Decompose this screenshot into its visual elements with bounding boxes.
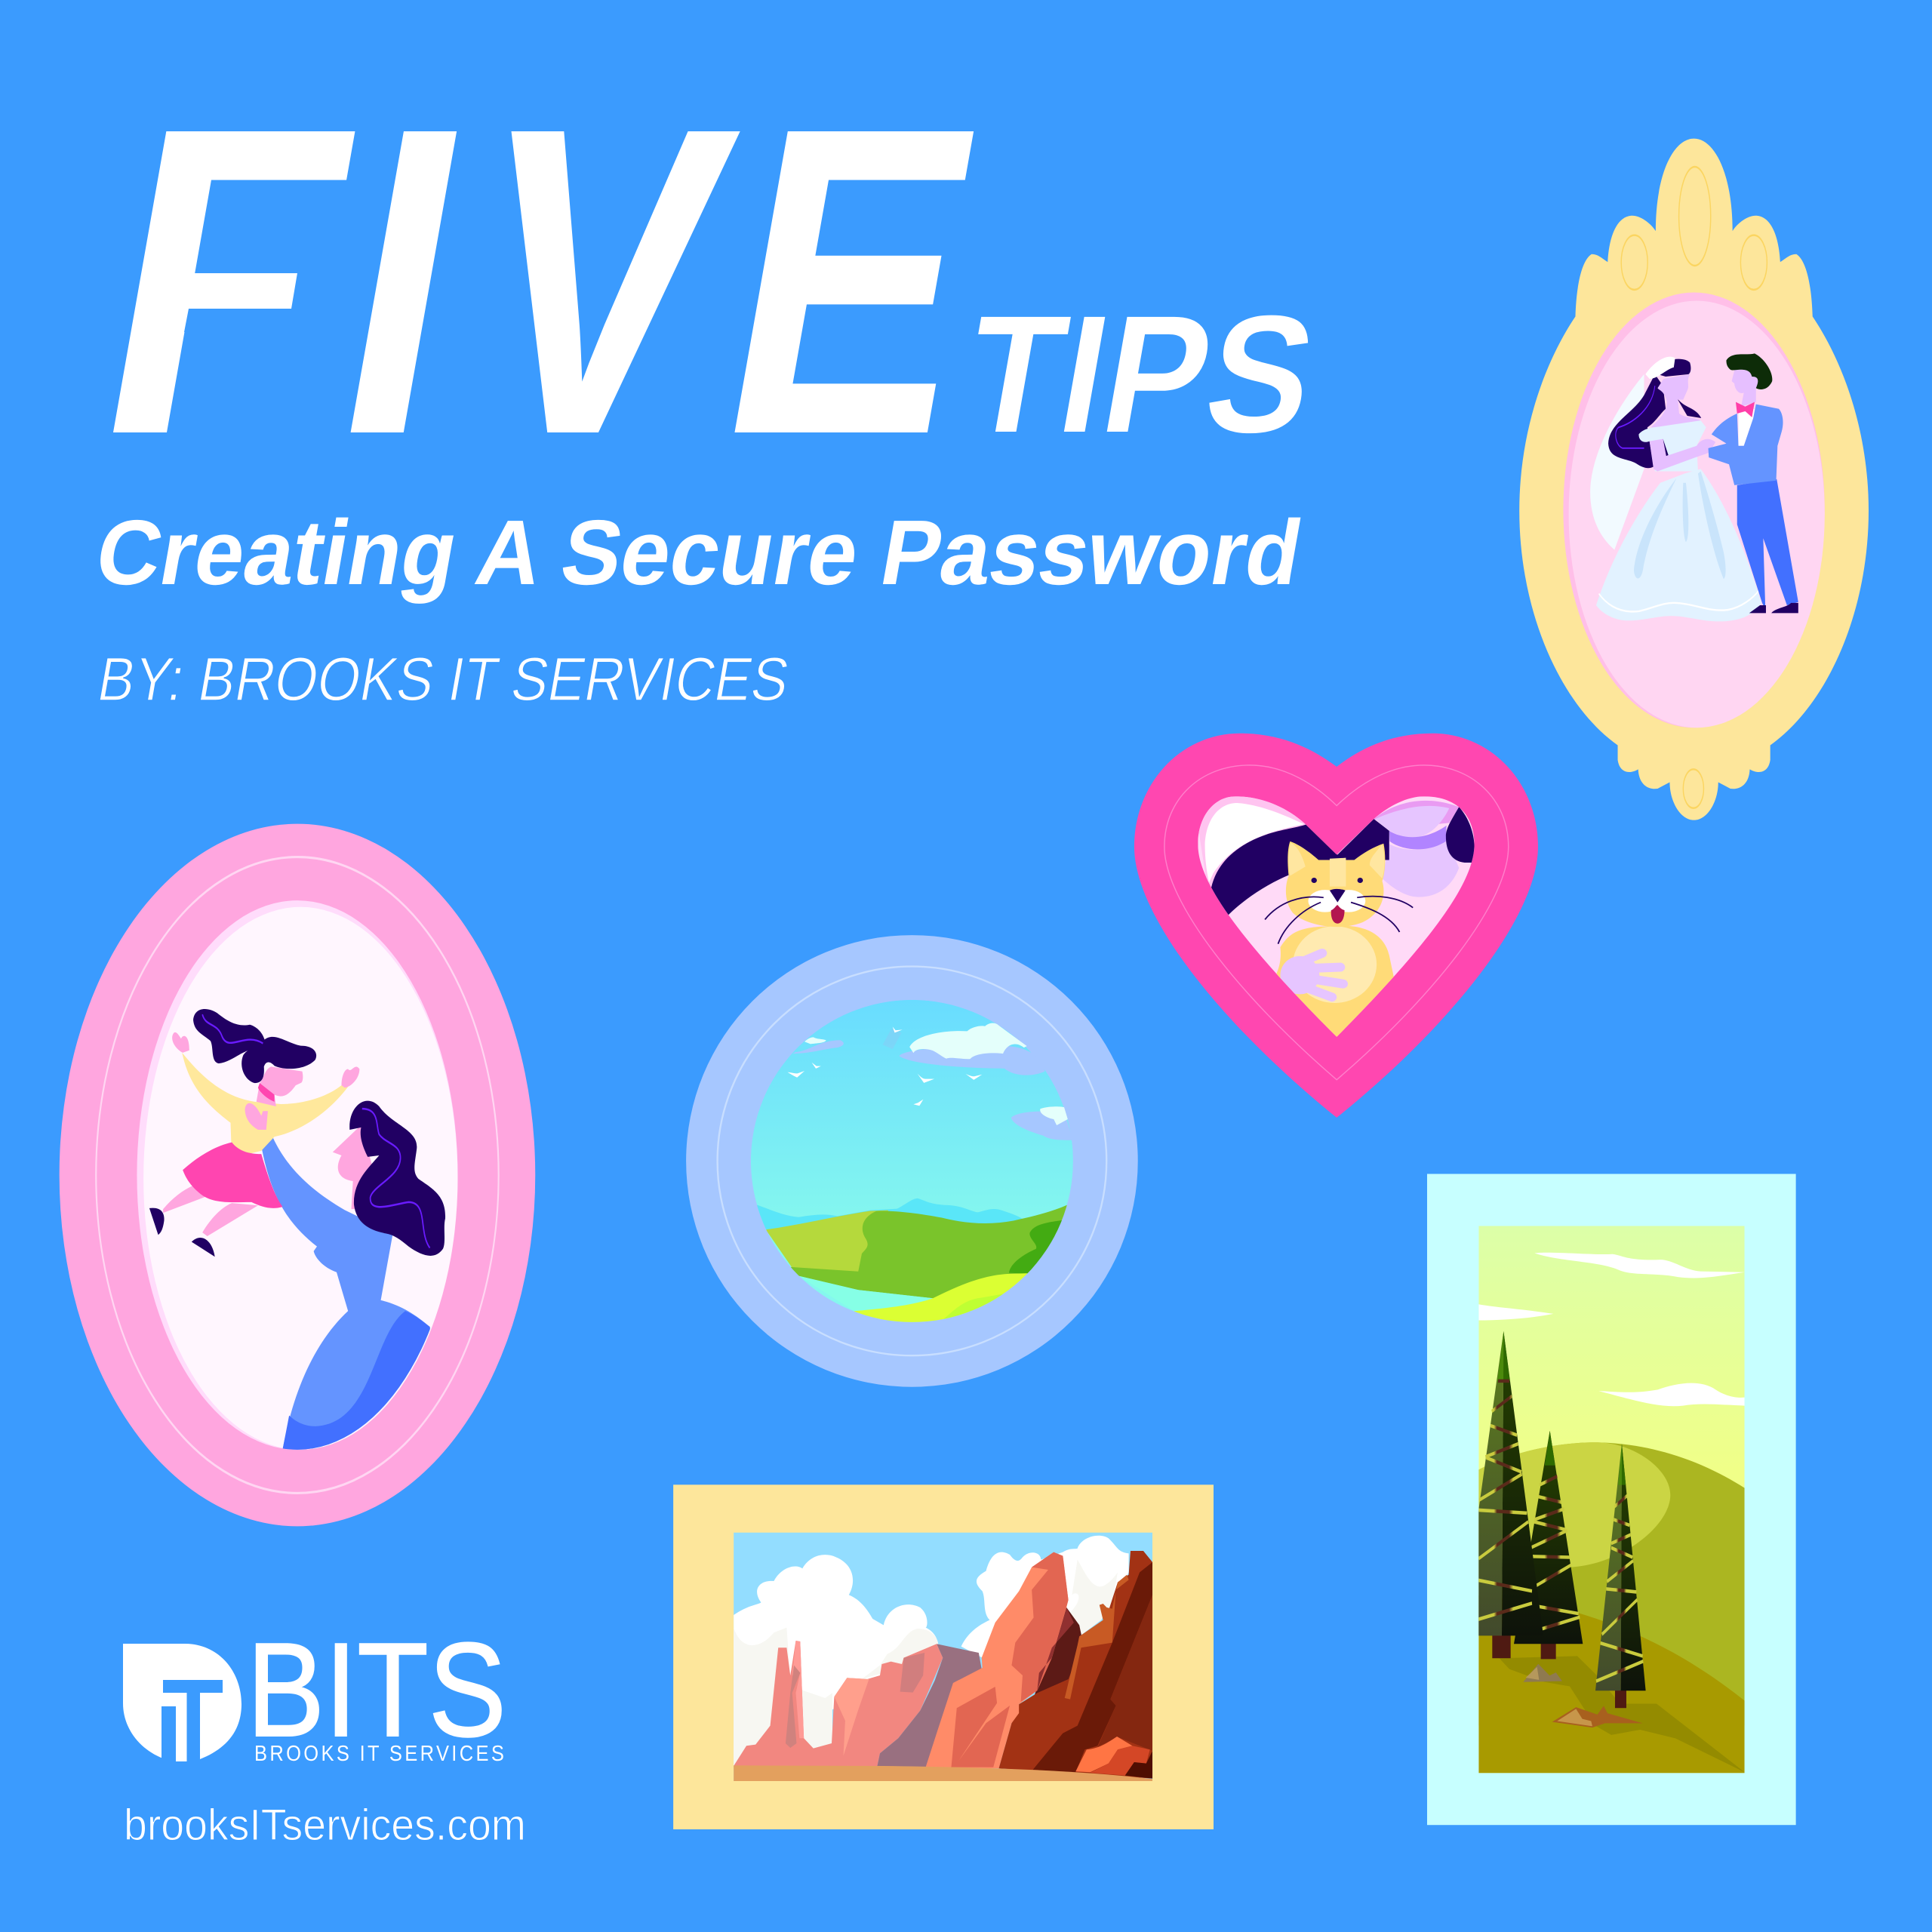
- title: FIVE: V: [439, 37, 761, 526]
- logo wordmark: BITS: [247, 1615, 506, 1764]
- clouds: [792, 1023, 1073, 1140]
- girl figure: [149, 1009, 359, 1257]
- logo: BITS: [123, 1615, 506, 1765]
- cat whiskers: [1265, 897, 1413, 944]
- logo tagline: BROOKS IT SERVICES: [254, 1740, 504, 1765]
- subtitle: Creating A Secure Password: [88, 502, 1309, 605]
- rocks: [734, 1641, 943, 1767]
- birds: [788, 1026, 982, 1106]
- panel: round landscape frame: [686, 935, 1138, 1387]
- website url: brooksITservices.com: [124, 1801, 526, 1850]
- clouds left: [734, 1555, 939, 1766]
- cat: [1275, 841, 1395, 1037]
- mother figure: [259, 1101, 445, 1461]
- hills: [1478, 1442, 1745, 1725]
- byline: BY: BROOKS IT SERVICES: [93, 645, 795, 714]
- title: TIPS: TIPS: [952, 280, 1329, 469]
- tree 3: [1595, 1444, 1646, 1708]
- tree 1: [1478, 1331, 1543, 1659]
- clouds: [1534, 1253, 1745, 1278]
- title: FIVE: [72, 35, 1011, 526]
- title: FIVE: I: [309, 36, 498, 525]
- panel: heart frame with cat: [1134, 734, 1538, 1118]
- panel: mother and daughter oval frame: [60, 824, 535, 1526]
- title: FIVE: F: [72, 37, 386, 526]
- panel: wedding ornate mirror frame: [1519, 139, 1869, 820]
- rocks: [1523, 1664, 1562, 1682]
- bride figure: [1590, 357, 1761, 621]
- tree 2: [1514, 1431, 1583, 1659]
- groom figure: [1709, 353, 1798, 613]
- clouds right: [961, 1536, 1129, 1658]
- panel: forest rectangle frame: [1427, 1174, 1796, 1825]
- title: FIVE: E: [695, 35, 1011, 525]
- panel: canyon rectangle frame: [673, 1484, 1214, 1829]
- icon: IT shield: [123, 1644, 242, 1762]
